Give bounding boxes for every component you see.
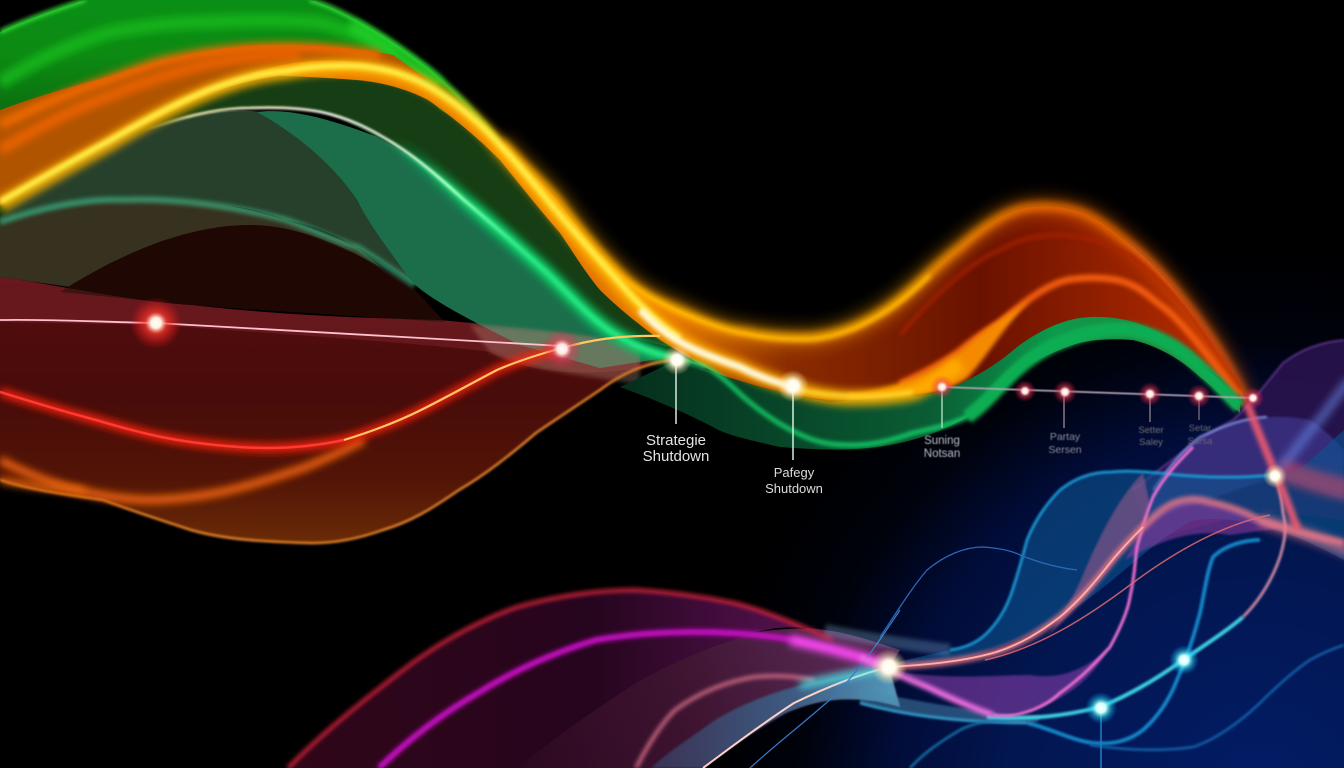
label: Setter Saley: Setter [1138,425,1164,436]
wave band: purple veil, upper right [1133,340,1344,540]
label: Strategic Shutdown: Strategie [646,432,706,449]
wave band: dark maroon hollow [60,225,445,322]
wave line: green band descending to centre [140,108,707,367]
label: Setar Sarsa: Sarsa [1188,436,1213,447]
label: Partay Sersen: Sersen [1048,444,1082,456]
wave line: red glowing line [0,336,660,448]
wave band: pale red ribbon over body [0,277,640,373]
wave band: pink-violet veil, lower right [860,447,1280,716]
label: Suning Notsan: Suning [924,435,960,447]
wave band: emerald veil panel [257,111,665,368]
wave band: translucent teal ribbon [0,111,415,285]
timeline: main left connector line [0,320,562,346]
label: Pafegy Shutdown: Pafegy [774,465,815,480]
wave line: yellow ribbon [0,66,960,398]
wave band: lower magenta ribbon [288,590,900,768]
timeline: right connector line [942,387,1253,398]
wave band: top green ribbon [0,0,500,143]
wave band: pale haze around centre node [470,325,640,385]
wave band: lower green ribbon [620,317,1240,450]
wave line: orange lower edge, left [0,360,670,543]
label: Strategic Shutdown: Shutdown [643,448,709,465]
label: Setar Sarsa: Setar [1189,423,1211,434]
wave band: blue ribbons, lower right [825,430,1344,768]
wave band: top-left orange ribbon [0,45,428,205]
wave band: brown veil, left [0,199,445,322]
wave band: main orange ribbon, centre to right [250,60,1247,403]
wave band: red body, left [0,277,677,543]
wave line: cyan arc through lower-right nodes [987,473,1285,718]
wave band: pink descending ribbon, right edge [1247,403,1344,530]
wave band: dark green shadow above white line [0,70,680,350]
label: Suning Notsan: Notsan [924,448,960,460]
label: Partay Sersen: Partay [1050,431,1081,443]
timeline nodes [130,297,1287,724]
label: Setter Saley: Saley [1139,437,1163,448]
wave line: pink ribbon across lower right [887,499,1344,667]
leader lines [676,362,1199,768]
label: Pafegy Shutdown: Shutdown [765,481,823,496]
